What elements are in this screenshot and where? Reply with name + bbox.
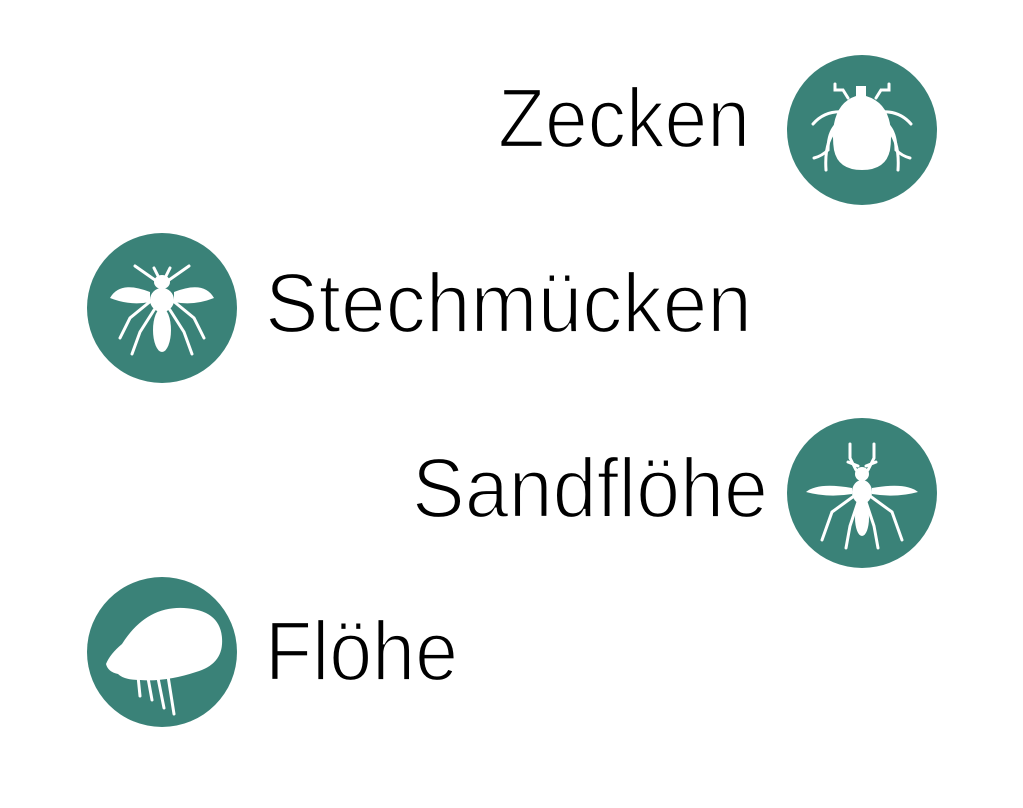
heading: Stechmücken: Stechmücken [265,256,752,350]
heading: Flöhe: Flöhe [265,604,458,698]
icon: sandfly [787,418,937,568]
heading: Zecken: Zecken [498,71,750,165]
icon: tick [787,55,937,205]
icon: flea [87,577,237,727]
icon: mosquito [87,233,237,383]
heading: Sandflöhe: Sandflöhe [412,441,768,535]
